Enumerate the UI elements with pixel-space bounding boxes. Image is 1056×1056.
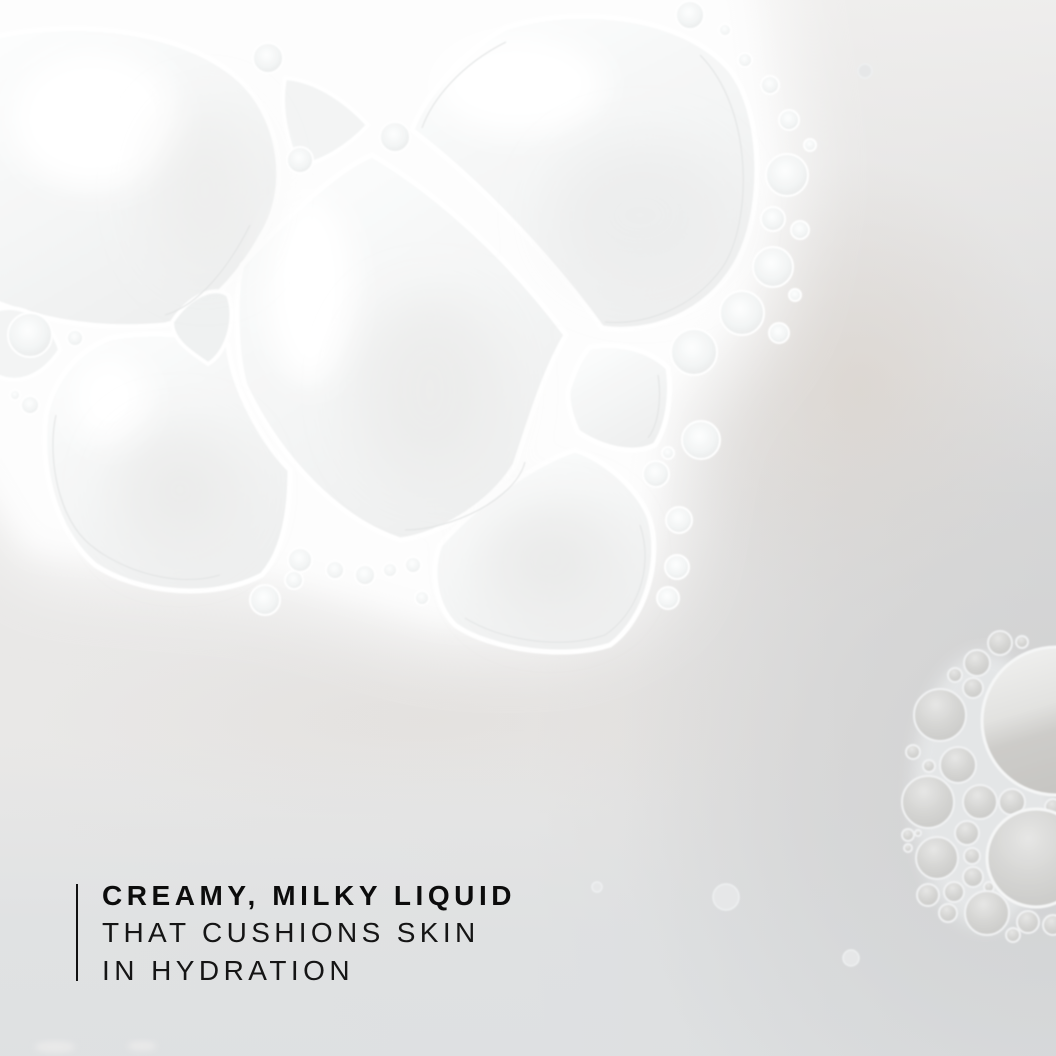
second large bubble bbox=[987, 809, 1056, 907]
cell: bottom right bbox=[435, 450, 654, 652]
foam cells bbox=[0, 16, 757, 652]
caption line two: THAT CUSHIONS SKIN bbox=[102, 917, 480, 948]
cell: small hexagon bbox=[568, 346, 669, 450]
cell: small triangular junction bbox=[172, 291, 231, 364]
cell shading bbox=[120, 110, 725, 615]
small foam bubbles around the cells bbox=[8, 1, 816, 615]
fine rim lines bbox=[53, 42, 743, 642]
cell: centre bbox=[237, 155, 566, 540]
cell: top left bbox=[0, 29, 279, 327]
large bubble bbox=[982, 647, 1056, 795]
stray bubbles on the liquid surface bbox=[592, 64, 872, 966]
cool bottom tone bbox=[0, 740, 1056, 1056]
bottom edge bubbles bbox=[35, 1041, 156, 1053]
cell: upper junction bbox=[283, 78, 368, 165]
caption rule bbox=[76, 884, 78, 981]
caption bbox=[76, 880, 516, 986]
warm shadow to the right of the foam bbox=[670, 160, 1050, 620]
cell highlights bbox=[10, 35, 605, 445]
caption heading: CREAMY, MILKY LIQUID bbox=[102, 880, 516, 911]
cell: left bbox=[45, 334, 290, 591]
grey bubble cluster, lower right bbox=[902, 631, 1056, 942]
white glow under foam bbox=[0, 0, 800, 640]
caption line three: IN HYDRATION bbox=[102, 955, 354, 986]
cell: top right bbox=[412, 16, 757, 329]
cell: left edge bbox=[0, 308, 60, 380]
